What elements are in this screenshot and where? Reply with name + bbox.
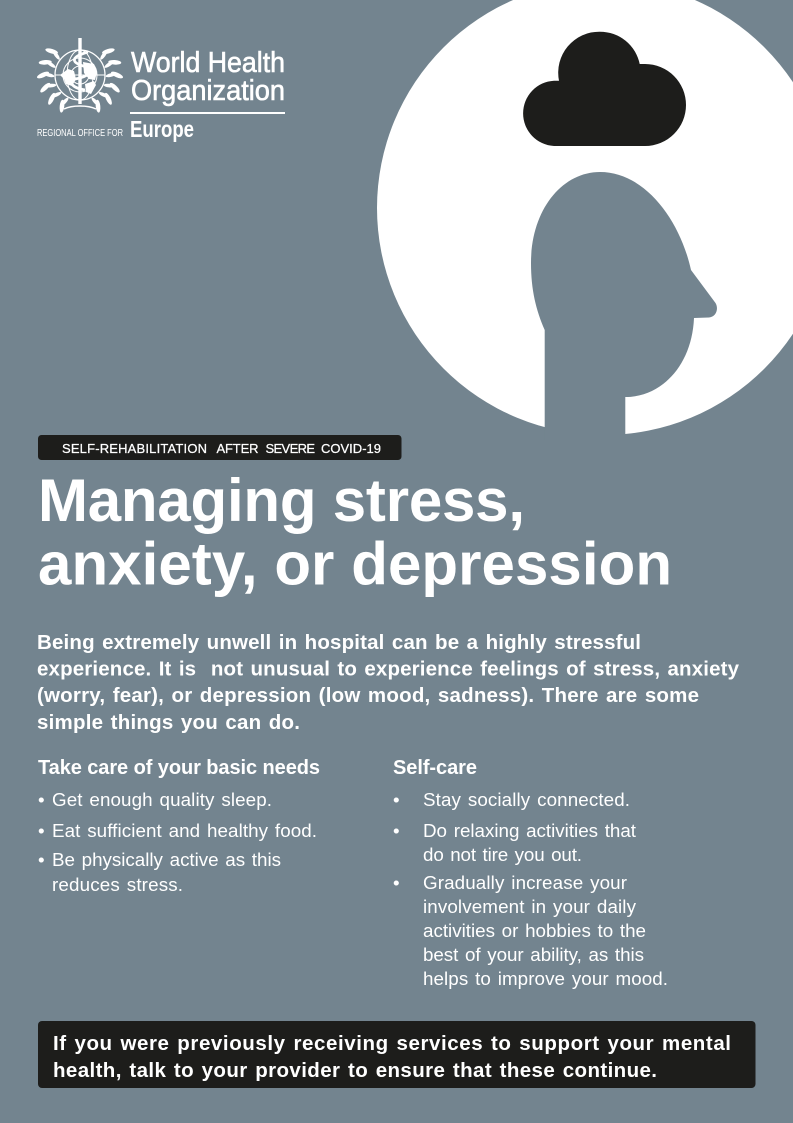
list: self-care: best of your ability, as this xyxy=(423,944,644,965)
callout: continuing services: If you were previously receiving services to support your mental xyxy=(53,1032,731,1055)
heading: self-care: Self-care xyxy=(393,757,477,779)
white circle xyxy=(377,0,793,435)
intro text: experience. It is not unusual to experience feelings of stress, anxiety xyxy=(37,658,740,680)
intro text: simple things you can do. xyxy=(37,711,300,734)
organization name: World Health xyxy=(131,47,285,79)
icon: WHO emblem xyxy=(36,38,124,113)
badge: series label: AFTER xyxy=(216,441,258,456)
list: self-care: • xyxy=(393,872,400,893)
list: basic needs: • xyxy=(38,820,45,841)
list: self-care: Stay socially connected. xyxy=(423,789,630,810)
title: anxiety, or depression xyxy=(38,530,672,598)
badge: series label xyxy=(38,435,402,460)
list: self-care: • xyxy=(393,820,400,841)
intro text: Being extremely unwell in hospital can be a highly stressful xyxy=(37,631,641,654)
list: self-care: helps to improve your mood. xyxy=(423,968,668,989)
icon: dark cloud xyxy=(523,32,686,146)
organization name xyxy=(131,47,285,107)
list: basic needs: • xyxy=(38,849,45,870)
list: basic needs: Get enough quality sleep. xyxy=(52,789,272,810)
list: basic needs xyxy=(38,789,317,895)
list: self-care: do not tire you out. xyxy=(423,844,582,865)
head silhouette xyxy=(531,172,717,440)
list: self-care: activities or hobbies to the xyxy=(423,920,646,941)
callout: continuing services: health, talk to your provider to ensure that these continue. xyxy=(53,1059,657,1082)
list: self-care: Gradually increase your xyxy=(423,872,627,893)
badge: series label: SEVERE xyxy=(266,441,315,456)
list: basic needs: Be physically active as this xyxy=(52,849,281,870)
intro text: (worry, fear), or depression (low mood, sadness). There are some xyxy=(37,684,699,707)
title: Managing stress, xyxy=(38,467,525,534)
list: basic needs: reduces stress. xyxy=(52,874,183,895)
regional office label xyxy=(37,116,194,142)
panel: self-care xyxy=(393,757,668,989)
list: self-care: • xyxy=(393,789,400,810)
heading: basic needs: Take care of your basic needs xyxy=(38,757,320,779)
intro text xyxy=(37,631,740,734)
list: self-care: Do relaxing activities that xyxy=(423,820,637,841)
list: self-care: involvement in your daily xyxy=(423,896,637,917)
regional office label: Europe xyxy=(130,116,194,142)
badge: series label: COVID-19 xyxy=(321,441,381,456)
list: basic needs: • xyxy=(38,789,45,810)
title xyxy=(38,467,672,598)
list: self-care xyxy=(393,789,668,989)
regional office label: REGIONAL OFFICE FOR xyxy=(37,127,123,139)
badge: series label: SELF-REHABILITATION xyxy=(62,441,207,456)
organization name: Organization xyxy=(131,75,285,107)
callout: continuing services xyxy=(38,1021,756,1088)
illustration: head with cloud in white circle xyxy=(377,0,793,440)
list: basic needs: Eat sufficient and healthy food. xyxy=(52,820,317,841)
panel: basic needs xyxy=(38,757,320,895)
WHO Europe logo xyxy=(36,38,285,142)
